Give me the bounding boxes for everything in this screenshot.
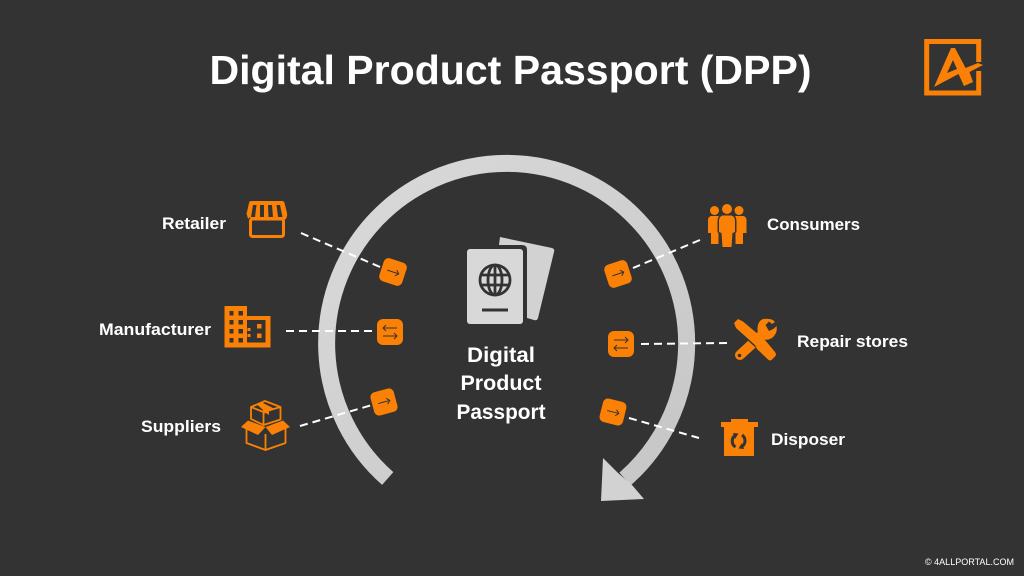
title: Digital Product Passport (DPP): [210, 47, 812, 93]
icon: people: [708, 204, 746, 247]
center label: Digital: [467, 343, 535, 367]
circular arrow: [327, 163, 687, 501]
icon: passport: [467, 237, 554, 324]
icon: boxes: [241, 401, 290, 450]
label: Manufacturer: Manufacturer: [99, 320, 211, 339]
badge: suppliers arrow: [369, 387, 399, 417]
badge: repair arrows: [608, 331, 634, 357]
center label: Product: [460, 371, 542, 395]
label: Consumers: Consumers: [767, 215, 860, 234]
icon: store: [246, 201, 287, 236]
copyright: © 4ALLPORTAL.COM: [925, 557, 1014, 567]
icon: company logo: [927, 42, 983, 93]
icon: tools: [734, 319, 777, 360]
dashed connectors: [286, 233, 727, 438]
label: Disposer: Disposer: [771, 430, 845, 449]
badge: disposer arrow: [598, 397, 628, 427]
center label: Passport: [456, 400, 546, 424]
center label: [456, 343, 546, 424]
icon: building: [224, 306, 270, 348]
badge: consumers arrow: [603, 259, 633, 289]
icon: recycling bin: [721, 419, 758, 456]
label: Retailer: Retailer: [162, 214, 226, 233]
label: Repair stores: Repair stores: [797, 332, 908, 351]
badge: retailer arrow: [378, 257, 408, 287]
badge: manufacturer arrows: [377, 319, 403, 345]
label: Suppliers: Suppliers: [141, 417, 221, 436]
